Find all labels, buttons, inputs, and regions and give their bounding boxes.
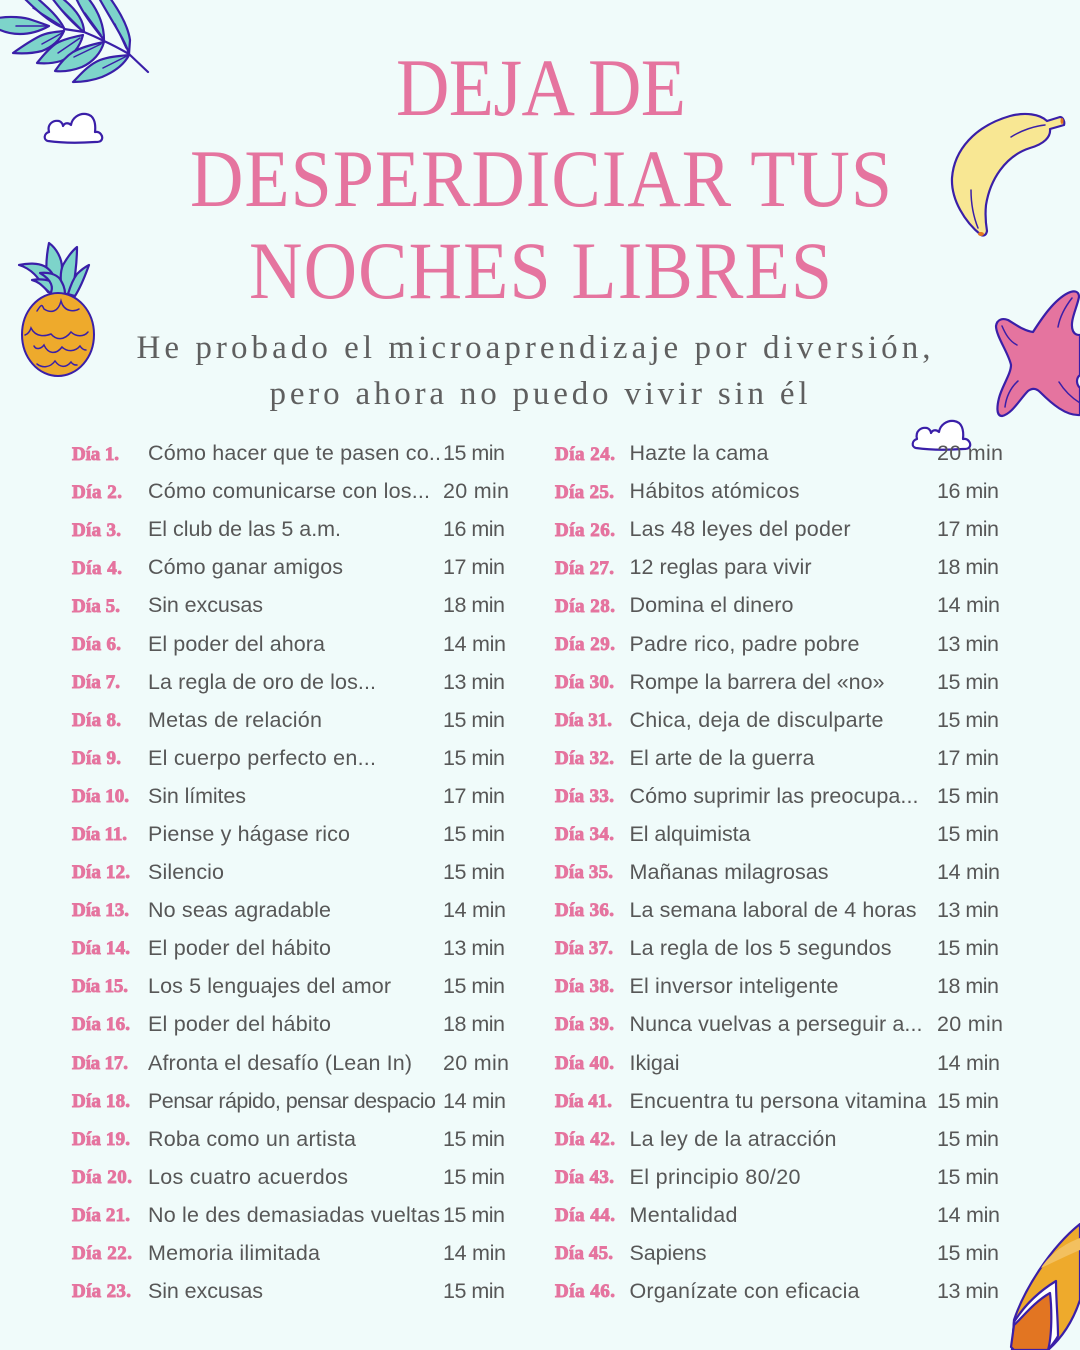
row: day 12: Silencio	[148, 860, 224, 884]
row: day 45: Día 45.	[555, 1243, 613, 1264]
row: day 44: 14 min	[937, 1203, 1000, 1227]
row: day 8: Metas de relación	[148, 708, 322, 732]
schedule column: days 1 to 23	[72, 441, 509, 1303]
row: day 25: Día 25.	[555, 482, 614, 503]
row: day 5: Día 5.	[72, 596, 120, 617]
row: day 43: El principio 80/20	[630, 1165, 801, 1189]
row: day 42: La ley de la atracción	[630, 1127, 836, 1151]
row: day 41	[555, 1089, 999, 1113]
title: NOCHES LIBRES	[249, 226, 832, 316]
row: day 12: Día 12.	[72, 862, 130, 883]
row: day 39: Nunca vuelvas a perseguir a...	[630, 1012, 922, 1036]
row: day 21: 15 min	[443, 1203, 505, 1227]
row: day 39	[555, 1012, 1003, 1036]
title: DESPERDICIAR TUS	[190, 134, 892, 224]
row: day 7: La regla de oro de los...	[148, 670, 376, 694]
row: day 15	[72, 974, 505, 998]
row: day 27: 18 min	[937, 555, 999, 579]
row: day 30: Rompe la barrera del «no»	[630, 670, 885, 694]
row: day 34	[555, 822, 999, 846]
row: day 10: Sin límites	[148, 784, 246, 808]
row: day 25: 16 min	[937, 479, 999, 503]
row: day 13	[72, 898, 506, 922]
row: day 6: 14 min	[443, 632, 506, 656]
row: day 45: 15 min	[937, 1241, 999, 1265]
row: day 5	[72, 593, 505, 617]
row: day 40	[555, 1051, 1000, 1075]
row: day 37	[555, 936, 999, 960]
row: day 2: 20 min	[443, 479, 509, 503]
row: day 8: Día 8.	[72, 710, 121, 731]
row: day 31: Chica, deja de disculparte	[630, 708, 884, 732]
icon: cloud left	[45, 114, 102, 143]
row: day 11: Piense y hágase rico	[148, 822, 350, 846]
row: day 30	[555, 670, 999, 694]
row: day 46: 13 min	[937, 1279, 999, 1303]
row: day 14: El poder del hábito	[148, 936, 331, 960]
row: day 46: Organízate con eficacia	[630, 1279, 860, 1303]
row: day 20: 15 min	[443, 1165, 505, 1189]
row: day 10	[72, 784, 505, 808]
row: day 2: Día 2.	[72, 482, 122, 503]
row: day 19	[72, 1127, 505, 1151]
row: day 29: 13 min	[937, 632, 999, 656]
row: day 14: Día 14.	[72, 938, 130, 959]
row: day 23	[72, 1279, 505, 1303]
row: day 31	[555, 708, 999, 732]
row: day 12	[72, 860, 505, 884]
row: day 35: 14 min	[937, 860, 1000, 884]
subtitle: He probado el microaprendizaje por diversión,	[136, 330, 930, 366]
row: day 27: 12 reglas para vivir	[630, 555, 812, 579]
row: day 7: Día 7.	[72, 672, 120, 693]
row: day 17: Afronta el desafío (Lean In)	[148, 1051, 412, 1075]
row: day 40: Día 40.	[555, 1053, 614, 1074]
row: day 18: Día 18.	[72, 1091, 130, 1112]
row: day 2	[72, 479, 509, 503]
row: day 1: Cómo hacer que te pasen co..	[148, 441, 441, 465]
row: day 43: Día 43.	[555, 1167, 614, 1188]
row: day 33: Cómo suprimir las preocupa...	[630, 784, 918, 808]
row: day 42: Día 42.	[555, 1129, 615, 1150]
row: day 19: Día 19.	[72, 1129, 130, 1150]
row: day 46	[555, 1279, 999, 1303]
row: day 18: 14 min	[443, 1089, 506, 1113]
subtitle	[136, 330, 930, 412]
row: day 39: Día 39.	[555, 1014, 614, 1035]
row: day 6	[72, 632, 506, 656]
row: day 37: 15 min	[937, 936, 999, 960]
row: day 33	[555, 784, 999, 808]
row: day 38: Día 38.	[555, 976, 614, 997]
row: day 29: Padre rico, padre pobre	[630, 632, 860, 656]
row: day 32: 17 min	[937, 746, 999, 770]
row: day 13: No seas agradable	[148, 898, 331, 922]
row: day 44: Mentalidad	[630, 1203, 738, 1227]
row: day 28: 14 min	[937, 593, 1000, 617]
row: day 35	[555, 860, 1000, 884]
row: day 9	[72, 746, 505, 770]
row: day 25: Hábitos atómicos	[630, 479, 800, 503]
row: day 26	[555, 517, 999, 541]
row: day 31: 15 min	[937, 708, 999, 732]
row: day 3: 16 min	[443, 517, 505, 541]
row: day 20: Los cuatro acuerdos	[148, 1165, 348, 1189]
row: day 41: 15 min	[937, 1089, 999, 1113]
row: day 13: 14 min	[443, 898, 506, 922]
row: day 5: 18 min	[443, 593, 505, 617]
row: day 7	[72, 670, 505, 694]
row: day 25	[555, 479, 999, 503]
row: day 7: 13 min	[443, 670, 505, 694]
row: day 31: Día 31.	[555, 710, 612, 731]
row: day 40: 14 min	[937, 1051, 1000, 1075]
row: day 15: Día 15.	[72, 976, 128, 997]
row: day 29	[555, 632, 999, 656]
row: day 36	[555, 898, 999, 922]
row: day 27	[555, 555, 999, 579]
row: day 11: 15 min	[443, 822, 505, 846]
row: day 3: El club de las 5 a.m.	[148, 517, 341, 541]
row: day 17: Día 17.	[72, 1053, 128, 1074]
row: day 32	[555, 746, 999, 770]
row: day 28	[555, 593, 1000, 617]
row: day 16: El poder del hábito	[148, 1012, 331, 1036]
icon: palm leaf	[0, 0, 148, 82]
row: day 43	[555, 1165, 999, 1189]
row: day 2: Cómo comunicarse con los...	[148, 479, 430, 503]
row: day 19: Roba como un artista	[148, 1127, 356, 1151]
row: day 4: 17 min	[443, 555, 505, 579]
row: day 44	[555, 1203, 1000, 1227]
row: day 14	[72, 936, 505, 960]
row: day 45: Sapiens	[630, 1241, 706, 1265]
row: day 1: Día 1.	[72, 444, 119, 465]
row: day 28: Domina el dinero	[630, 593, 794, 617]
row: day 4	[72, 555, 505, 579]
row: day 37: Día 37.	[555, 938, 613, 959]
row: day 23: Sin excusas	[148, 1279, 263, 1303]
subtitle: pero ahora no puedo vivir sin él	[270, 376, 808, 412]
row: day 33: 15 min	[937, 784, 999, 808]
row: day 4: Cómo ganar amigos	[148, 555, 343, 579]
row: day 21	[72, 1203, 505, 1227]
title	[190, 43, 892, 316]
row: day 21: No le des demasiadas vueltas	[148, 1203, 440, 1227]
row: day 32: Día 32.	[555, 748, 614, 769]
row: day 26: Las 48 leyes del poder	[630, 517, 850, 541]
row: day 16: 18 min	[443, 1012, 505, 1036]
row: day 24	[555, 441, 1003, 465]
row: day 6: Día 6.	[72, 634, 121, 655]
row: day 32: El arte de la guerra	[630, 746, 815, 770]
row: day 12: 15 min	[443, 860, 505, 884]
row: day 35: Mañanas milagrosas	[630, 860, 828, 884]
row: day 3	[72, 517, 505, 541]
row: day 18: Pensar rápido, pensar despacio	[148, 1089, 436, 1113]
row: day 9: El cuerpo perfecto en...	[148, 746, 376, 770]
row: day 16	[72, 1012, 505, 1036]
row: day 17	[72, 1051, 509, 1075]
row: day 20	[72, 1165, 505, 1189]
row: day 1: 15 min	[443, 441, 505, 465]
row: day 42: 15 min	[937, 1127, 999, 1151]
row: day 41: Día 41.	[555, 1091, 612, 1112]
row: day 22: Memoria ilimitada	[148, 1241, 320, 1265]
row: day 43: 15 min	[937, 1165, 999, 1189]
row: day 8: 15 min	[443, 708, 505, 732]
row: day 16: Día 16.	[72, 1014, 130, 1035]
row: day 17: 20 min	[443, 1051, 509, 1075]
row: day 34: 15 min	[937, 822, 999, 846]
row: day 36: 13 min	[937, 898, 999, 922]
row: day 26: Día 26.	[555, 520, 615, 541]
row: day 4: Día 4.	[72, 558, 122, 579]
row: day 29: Día 29.	[555, 634, 615, 655]
row: day 27: Día 27.	[555, 558, 614, 579]
row: day 14: 13 min	[443, 936, 505, 960]
row: day 11	[72, 822, 505, 846]
row: day 6: El poder del ahora	[148, 632, 325, 656]
row: day 37: La regla de los 5 segundos	[630, 936, 892, 960]
row: day 33: Día 33.	[555, 786, 614, 807]
row: day 30: Día 30.	[555, 672, 614, 693]
row: day 22: Día 22.	[72, 1243, 132, 1264]
row: day 24: 20 min	[937, 441, 1003, 465]
icon: banana	[952, 114, 1064, 236]
icon: pineapple	[19, 243, 94, 376]
row: day 10: Día 10.	[72, 786, 129, 807]
icon: surfboard	[1011, 1224, 1080, 1350]
icon: starfish	[996, 291, 1080, 416]
row: day 38	[555, 974, 999, 998]
row: day 11: Día 11.	[72, 824, 127, 845]
row: day 36: La semana laboral de 4 horas	[630, 898, 916, 922]
row: day 35: Día 35.	[555, 862, 613, 883]
row: day 23: Día 23.	[72, 1281, 131, 1302]
row: day 20: Día 20.	[72, 1167, 132, 1188]
row: day 8	[72, 708, 505, 732]
row: day 9: Día 9.	[72, 748, 121, 769]
row: day 10: 17 min	[443, 784, 505, 808]
row: day 46: Día 46.	[555, 1281, 615, 1302]
row: day 36: Día 36.	[555, 900, 614, 921]
row: day 40: Ikigai	[630, 1051, 680, 1075]
row: day 41: Encuentra tu persona vitamina	[630, 1089, 927, 1113]
title: DEJA DE	[396, 43, 686, 133]
row: day 30: 15 min	[937, 670, 999, 694]
schedule column: days 24 to 46	[555, 441, 1003, 1303]
row: day 24: Hazte la cama	[630, 441, 769, 465]
row: day 28: Día 28.	[555, 596, 615, 617]
row: day 34: Día 34.	[555, 824, 614, 845]
row: day 23: 15 min	[443, 1279, 505, 1303]
row: day 5: Sin excusas	[148, 593, 263, 617]
row: day 38: 18 min	[937, 974, 999, 998]
row: day 9: 15 min	[443, 746, 505, 770]
row: day 44: Día 44.	[555, 1205, 615, 1226]
row: day 24: Día 24.	[555, 444, 615, 465]
row: day 3: Día 3.	[72, 520, 121, 541]
row: day 45	[555, 1241, 999, 1265]
row: day 15: Los 5 lenguajes del amor	[148, 974, 391, 998]
row: day 42	[555, 1127, 999, 1151]
row: day 22	[72, 1241, 506, 1265]
row: day 34: El alquimista	[630, 822, 751, 846]
row: day 19: 15 min	[443, 1127, 505, 1151]
row: day 22: 14 min	[443, 1241, 506, 1265]
row: day 15: 15 min	[443, 974, 505, 998]
row: day 39: 20 min	[937, 1012, 1003, 1036]
row: day 18	[72, 1089, 506, 1113]
row: day 1	[72, 441, 505, 465]
row: day 38: El inversor inteligente	[630, 974, 838, 998]
row: day 26: 17 min	[937, 517, 999, 541]
icon: cloud right	[913, 421, 970, 450]
row: day 13: Día 13.	[72, 900, 129, 921]
row: day 21: Día 21.	[72, 1205, 130, 1226]
